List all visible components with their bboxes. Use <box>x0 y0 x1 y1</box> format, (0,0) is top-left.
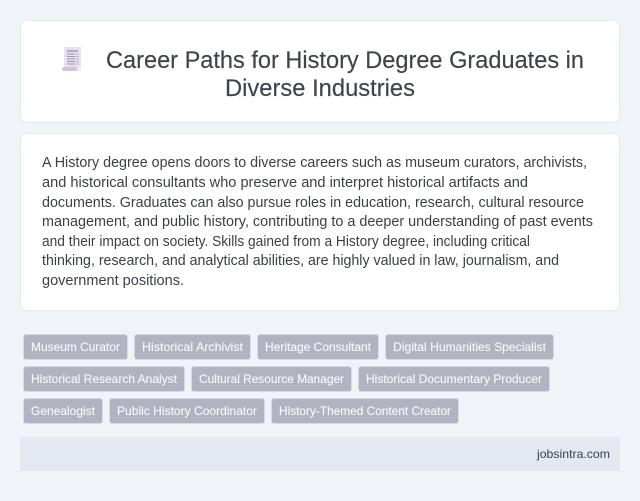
tag: Historical Documentary Producer: Historical Documentary Producer <box>366 372 542 386</box>
description text: documents. Graduates can also pursue roles in education, research, cultural resource <box>42 195 584 211</box>
icon: scroll document <box>62 47 81 71</box>
tag: Historical Archivist: Historical Archivist <box>142 340 244 354</box>
tag: Digital Humanities Specialist: Digital Humanities Specialist <box>393 340 547 354</box>
tag: Heritage Consultant: Heritage Consultant <box>265 340 372 354</box>
tag: Historical Research Analyst <box>24 366 184 392</box>
title <box>106 47 584 102</box>
description text <box>42 155 593 289</box>
tag: Museum Curator <box>24 334 128 360</box>
description text: and historical consultants who preserve and interpret historical artifacts and <box>42 175 528 191</box>
tag: Genealogist: Genealogist <box>31 404 96 418</box>
tag: Digital Humanities Specialist <box>386 334 554 360</box>
description text: and their impact on society. Skills gained from a History degree, including critical <box>42 234 530 250</box>
tag: Historical Research Analyst: Historical Research Analyst <box>31 372 178 386</box>
tag: Public History Coordinator <box>110 398 264 424</box>
header panel <box>20 20 620 122</box>
tag: History-Themed Content Creator <box>272 398 458 424</box>
tag: Museum Curator: Museum Curator <box>31 340 120 354</box>
description panel <box>20 134 620 310</box>
title: Diverse Industries <box>225 75 415 102</box>
footer <box>20 437 620 471</box>
tag: Historical Documentary Producer <box>358 366 550 392</box>
title: Career Paths for History Degree Graduates in <box>106 47 584 74</box>
footer source text: jobsintra.com <box>536 447 610 461</box>
tag: Cultural Resource Manager: Cultural Resource Manager <box>199 372 344 386</box>
description text: management, and public history, contributing to a deeper understanding of past events <box>42 214 593 230</box>
tags <box>24 334 554 424</box>
description text: thinking, research, and analytical abilities, are highly valued in law, journalism, and <box>42 253 559 269</box>
tag: Heritage Consultant <box>258 334 378 360</box>
tag: Historical Archivist <box>134 334 250 360</box>
tag: Public History Coordinator: Public History Coordinator <box>117 404 257 418</box>
tag: Cultural Resource Manager <box>192 366 352 392</box>
description text: government positions. <box>42 273 184 289</box>
description text: A History degree opens doors to diverse careers such as museum curators, archivists, <box>42 155 587 171</box>
tag: Genealogist <box>24 398 102 424</box>
tag: History-Themed Content Creator: History-Themed Content Creator <box>279 404 451 418</box>
